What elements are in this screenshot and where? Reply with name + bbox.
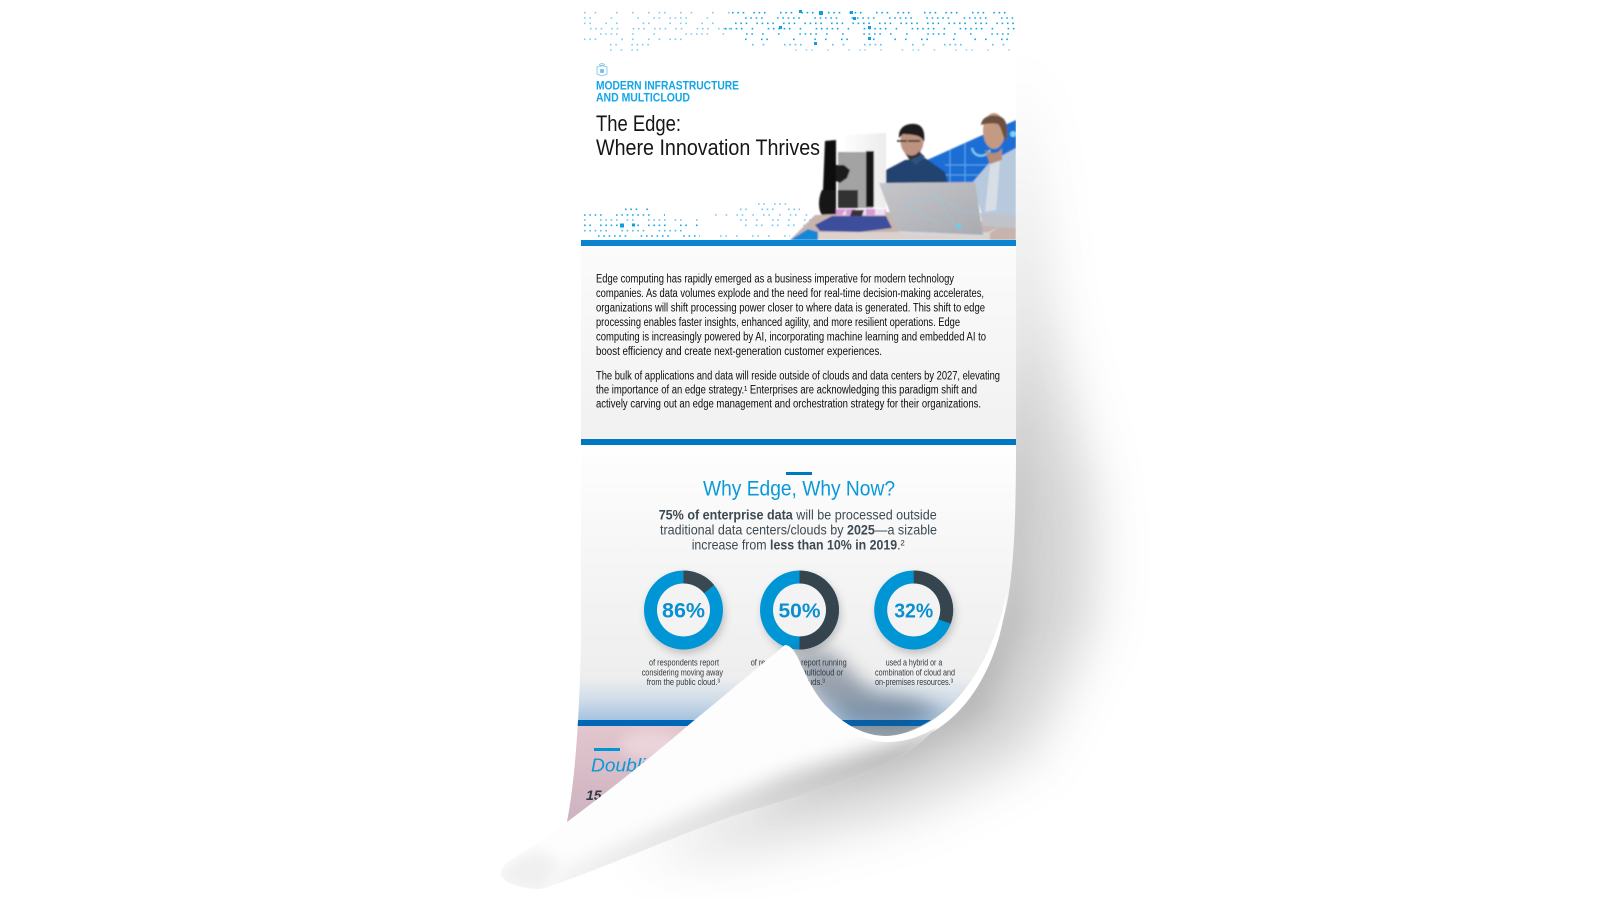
icon: wifi lock — [597, 64, 607, 76]
blue circuit triangle — [927, 120, 1016, 185]
caption: 32%: used a hybrid or a — [886, 658, 942, 668]
header rule — [575, 240, 1020, 246]
paragraph 1: Edge computing has rapidly emerged as a business imperative for modern technology — [596, 273, 954, 285]
caption: 86%: considering moving away — [642, 668, 723, 678]
donut: 50% — [760, 570, 839, 650]
curl window lower fill — [851, 726, 921, 736]
paragraph 1 — [596, 273, 986, 358]
person with glasses — [886, 124, 948, 183]
key statistic statement: increase from less than 10% in 2019.² — [692, 536, 905, 552]
lower section statistic: 15.4 — [586, 787, 613, 803]
lower section heading: Doubling Down — [591, 756, 721, 776]
caption: 86%: from the public cloud.³ — [647, 677, 720, 687]
paragraph 1: organizations will shift processing power closer to where data is generated. This shift to edge — [596, 302, 985, 314]
paragraph 1: companies. As data volumes explode and the need for real-time decision-making accelerates, — [596, 288, 984, 300]
caption: 50%: hybrid clouds.³ — [775, 677, 825, 687]
category label: MODERN INFRASTRUCTURE — [596, 78, 739, 92]
section rule — [575, 439, 1020, 445]
paragraph 2: actively carving out an edge management and orchestration strategy for their organizations. — [596, 399, 981, 411]
laptop — [879, 182, 1016, 238]
caption: 32%: on-premises resources.³ — [875, 677, 953, 687]
caption: 32%: combination of cloud and — [875, 668, 955, 678]
caption: 86% — [642, 658, 723, 687]
donut: 32%: 32% — [894, 601, 933, 623]
section heading: Why Edge, Why Now? — [703, 477, 895, 501]
title — [596, 115, 820, 155]
page curl rim — [825, 590, 1007, 744]
person in light shirt — [972, 113, 1016, 215]
caption: 50%: workloads in multicloud or — [755, 668, 843, 678]
page curl — [501, 645, 936, 889]
paragraph 2: the importance of an edge strategy.¹ Enterprises are acknowledging this paradigm shift and — [596, 384, 977, 396]
caption: 50%: of respondents report running — [751, 658, 847, 668]
shadow cast by curl onto page — [782, 650, 945, 725]
caption: 50% — [751, 659, 846, 685]
paragraph 2 — [596, 370, 1000, 411]
paragraph 1: processing enables faster insights, enhanced agility, and more resilient operations. Edge — [596, 317, 960, 329]
key statistic statement: traditional data centers/clouds by 2025—a sizable — [660, 522, 937, 538]
donut: 32% — [874, 570, 953, 650]
category label — [596, 81, 739, 102]
page background — [567, 246, 1016, 822]
key statistic statement — [659, 510, 936, 550]
bottom dot pattern — [584, 204, 815, 236]
title: The Edge: — [596, 111, 681, 136]
curl edge shading — [562, 728, 936, 882]
paragraph 2: The bulk of applications and data will reside outside of clouds and data centers by 2027, elevating — [596, 370, 1000, 382]
key statistic statement: 75% of enterprise data will be processed outside — [659, 506, 937, 522]
donut: 50%: 50% — [778, 601, 821, 623]
monitor — [819, 140, 874, 215]
caption: 86%: of respondents report — [649, 658, 719, 668]
donut: 86%: 86% — [662, 600, 705, 623]
paragraph 1: computing is increasingly powered by AI, incorporating machine learning and embedded AI to — [596, 331, 986, 343]
category label: AND MULTICLOUD — [596, 90, 690, 104]
infographic page — [560, 0, 1030, 836]
section accent bar — [786, 472, 812, 475]
drop shadow behind page — [640, 70, 1090, 858]
header photo — [790, 113, 1016, 240]
desk — [790, 209, 1016, 240]
lower section rule — [578, 720, 931, 726]
title: Where Innovation Thrives — [596, 135, 820, 160]
intro copy — [596, 273, 1000, 411]
curl tip shading — [504, 854, 552, 888]
paragraph 1: boost efficiency and create next-generation customer experiences. — [596, 346, 882, 358]
caption: 32% — [875, 658, 955, 687]
donut: 86% — [644, 570, 723, 650]
lower section accent bar — [594, 748, 620, 751]
top dot pattern — [584, 10, 1016, 50]
monitor panel — [860, 133, 888, 208]
